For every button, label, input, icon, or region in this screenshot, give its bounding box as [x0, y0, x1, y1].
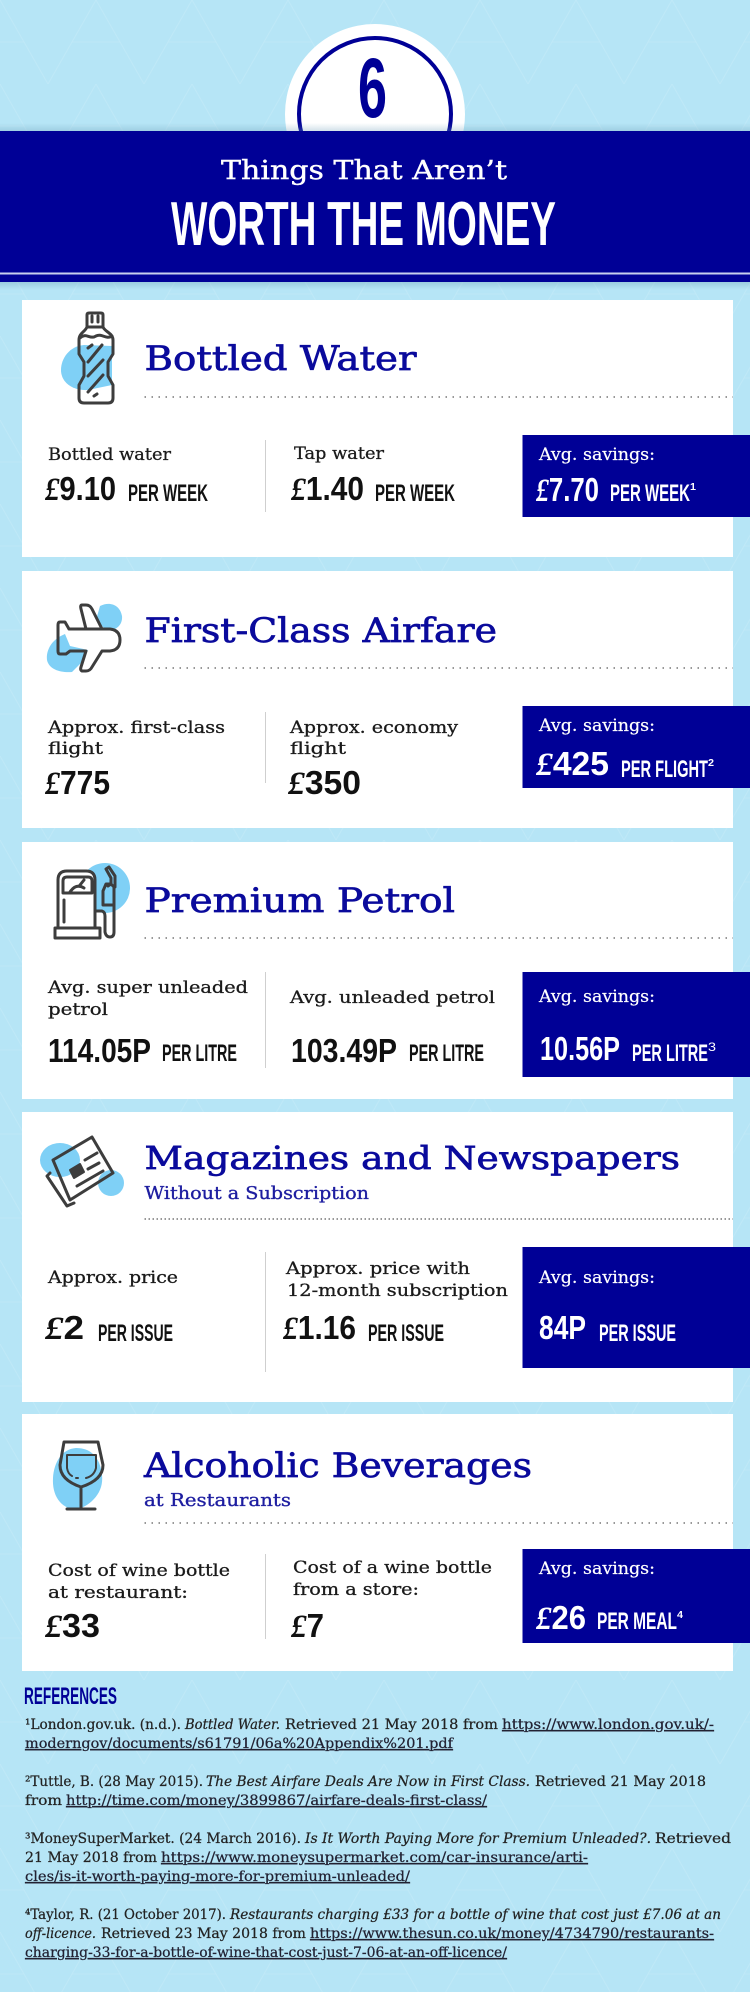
icon: wine glass: [53, 1442, 103, 1510]
savings box: PER WEEK: [610, 480, 690, 507]
title banner: Things That Aren’t: [221, 156, 508, 186]
tap water price: [290, 444, 455, 508]
savings box: 1: [690, 482, 696, 493]
reference 4: [25, 1907, 721, 1961]
savings box: PER ISSUE: [599, 1320, 676, 1347]
subscription price: Approx. price with: [285, 1259, 470, 1278]
store cost: from a store:: [293, 1580, 419, 1599]
super unleaded price: PER LITRE: [162, 1040, 237, 1067]
savings box: Avg. savings:: [538, 716, 655, 735]
approx price: PER ISSUE: [98, 1320, 173, 1347]
economy price: Approx. economy: [289, 718, 459, 737]
restaurant cost: Cost of wine bottle: [48, 1561, 230, 1580]
icon: aeroplane: [47, 604, 122, 672]
first-class price: Approx. first-class: [47, 718, 225, 737]
reference 2: from: [25, 1793, 62, 1809]
store cost: Cost of a wine bottle: [293, 1558, 492, 1577]
panel: premium petrol: [22, 842, 750, 1099]
heading: First-Class Airfare: [144, 611, 497, 651]
super unleaded price: petrol: [48, 1000, 108, 1019]
reference 4: charging-33-for-a-bottle-of-wine-that-cost-just-7-06-at-an-off-licence/: [25, 1945, 507, 1961]
economy price: [287, 718, 459, 802]
icon: water bottle: [61, 313, 113, 403]
subscription price: £1.16: [282, 1309, 356, 1347]
number badge: 6: [358, 41, 387, 135]
reference 3: Is It Worth Paying More for Premium Unleaded?.: [304, 1831, 651, 1847]
title banner: [0, 131, 750, 282]
subscription price: 12-month subscription: [287, 1281, 508, 1300]
super unleaded price: [47, 978, 249, 1069]
subheading: at Restaurants: [144, 1490, 291, 1511]
savings box: 4: [677, 1610, 683, 1621]
reference 4: ⁴Taylor, R. (21 October 2017).: [25, 1907, 226, 1923]
tap water price: £1.40: [290, 470, 364, 508]
subscription price: PER ISSUE: [368, 1320, 444, 1347]
savings box: £7.70: [535, 471, 599, 509]
savings box: Avg. savings:: [538, 1559, 655, 1578]
reference 2: ²Tuttle, B. (28 May 2015).: [25, 1774, 203, 1790]
heading: Magazines and Newspapers: [144, 1139, 680, 1177]
unleaded price: 103.49P: [291, 1032, 397, 1069]
bottled water price: [44, 445, 208, 508]
heading: Premium Petrol: [144, 881, 455, 921]
approx price: Approx. price: [47, 1268, 178, 1287]
reference 1: Retrieved 21 May 2018 from: [285, 1717, 498, 1733]
savings box: 84P: [539, 1309, 586, 1346]
unleaded price: Avg. unleaded petrol: [289, 988, 495, 1007]
unleaded price: [289, 988, 495, 1069]
super unleaded price: Avg. super unleaded: [47, 978, 249, 997]
reference 4: Restaurants charging £33 for a bottle of wine that cost just £7.06 at an: [229, 1907, 721, 1923]
store cost: £7: [290, 1607, 324, 1645]
reference 4: off-licence.: [25, 1926, 96, 1942]
savings box: Avg. savings:: [538, 1268, 655, 1287]
reference 2: Retrieved 21 May 2018: [535, 1774, 706, 1790]
savings box: PER MEAL: [597, 1608, 677, 1635]
header: [0, 24, 750, 290]
reference 2: The Best Airfare Deals Are Now in First Class.: [206, 1774, 530, 1790]
reference 1: ¹London.gov.uk. (n.d.).: [25, 1717, 181, 1733]
savings box: 2: [708, 758, 714, 769]
number badge: [285, 24, 465, 204]
subscription price: [282, 1259, 508, 1347]
savings box: [522, 972, 750, 1077]
approx price: [44, 1268, 178, 1347]
savings box: [522, 1549, 750, 1643]
panel: alcoholic beverages: [22, 1414, 750, 1671]
bottled water price: Bottled water: [48, 445, 171, 464]
savings box: £26: [535, 1599, 586, 1637]
references heading: REFERENCES: [24, 1683, 117, 1710]
savings box: [522, 706, 750, 788]
tap water price: PER WEEK: [375, 480, 455, 507]
economy price: £350: [287, 764, 361, 802]
reference 4: Retrieved 23 May 2018 from: [101, 1926, 306, 1942]
bottled water price: £9.10: [44, 470, 116, 508]
icon: newspaper: [40, 1137, 124, 1206]
panel: first-class airfare: [22, 571, 750, 828]
super unleaded price: 114.05P: [48, 1032, 151, 1069]
first-class price: flight: [48, 739, 103, 758]
economy price: flight: [290, 739, 346, 758]
savings box: [522, 1247, 750, 1368]
store cost: [290, 1558, 492, 1645]
reference 2: [25, 1774, 706, 1809]
unleaded price: PER LITRE: [409, 1040, 484, 1067]
reference 2: http://time.com/money/3899867/airfare-deals-first-class/: [66, 1793, 487, 1809]
approx price: £2: [44, 1309, 84, 1347]
savings box: [522, 435, 750, 517]
savings box: 3: [708, 1040, 716, 1054]
first-class price: [44, 718, 225, 802]
heading: Bottled Water: [144, 339, 417, 379]
bottled water price: PER WEEK: [128, 480, 208, 507]
restaurant cost: at restaurant:: [48, 1583, 188, 1602]
reference 3: ³MoneySuperMarket. (24 March 2016).: [25, 1831, 301, 1847]
reference 4: https://www.thesun.co.uk/money/4734790/restaurants-: [310, 1926, 714, 1942]
restaurant cost: [44, 1561, 230, 1645]
reference 3: cles/is-it-worth-paying-more-for-premium-unleaded/: [25, 1869, 410, 1885]
savings box: Avg. savings:: [538, 987, 655, 1006]
savings box: £425: [535, 745, 609, 783]
panel: magazines and newspapers: [22, 1112, 750, 1402]
panel: bottled water: [22, 300, 750, 557]
reference 3: https://www.moneysupermarket.com/car-insurance/arti-: [161, 1850, 588, 1866]
restaurant cost: £33: [44, 1607, 100, 1645]
savings box: Avg. savings:: [538, 445, 655, 464]
reference 3: 21 May 2018 from: [25, 1850, 157, 1866]
savings box: 10.56P: [540, 1030, 620, 1067]
icon: petrol pump: [55, 863, 130, 938]
reference 1: https://www.london.gov.uk/-: [502, 1717, 714, 1733]
tap water price: Tap water: [294, 444, 384, 463]
reference 3: Retrieved: [655, 1831, 731, 1847]
reference 1: Bottled Water.: [184, 1717, 280, 1733]
subheading: Without a Subscription: [144, 1183, 369, 1204]
references: [24, 1683, 731, 1961]
first-class price: £775: [44, 764, 110, 802]
reference 1: [25, 1717, 714, 1752]
reference 1: moderngov/documents/s61791/06a%20Appendix%201.pdf: [25, 1736, 455, 1752]
reference 3: [25, 1831, 731, 1885]
heading: Alcoholic Beverages: [143, 1446, 532, 1486]
